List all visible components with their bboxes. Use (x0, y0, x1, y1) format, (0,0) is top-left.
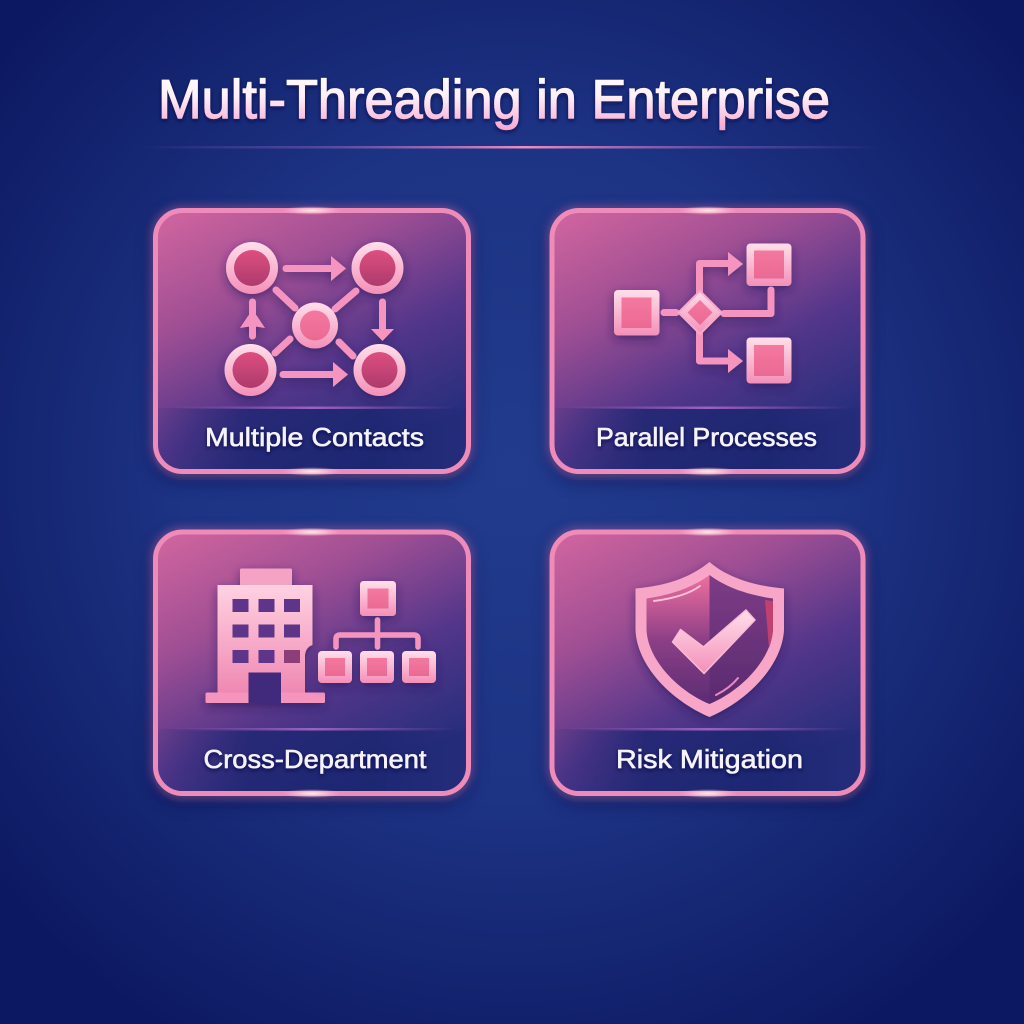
icon: shield with check mark (636, 562, 784, 717)
panel: Risk Mitigation (550, 528, 866, 802)
label: Multiple Contacts: Multiple Contacts (205, 422, 424, 452)
label: Risk Mitigation: Risk Mitigation (616, 744, 803, 774)
panel: Parallel Processes (550, 206, 866, 480)
title: Multi-Threading in Enterprise (158, 68, 830, 130)
label: Cross-Department: Cross-Department (204, 744, 427, 774)
label: Parallel Processes: Parallel Processes (596, 422, 817, 452)
icon: network of contacts (224, 242, 406, 396)
panel: Cross-Department (153, 528, 471, 802)
icon: branching process flow (614, 244, 792, 384)
icon: org chart (318, 581, 436, 683)
icon: office building (206, 568, 325, 704)
panel: Multiple Contacts (153, 206, 471, 480)
